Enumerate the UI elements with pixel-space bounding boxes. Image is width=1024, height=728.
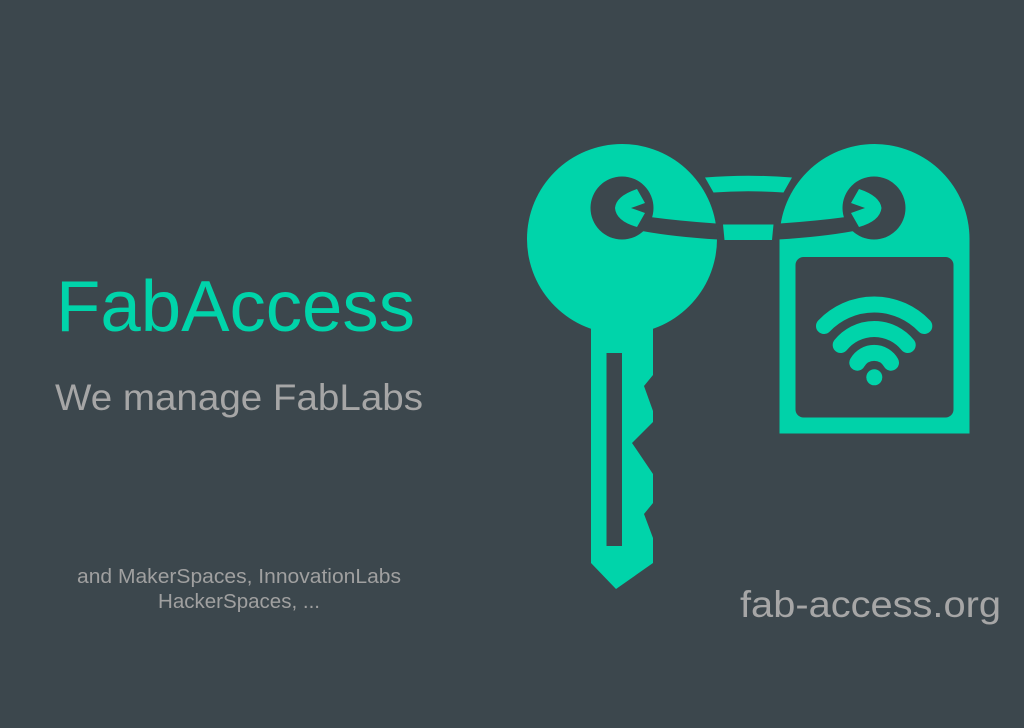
tag hole bbox=[842, 176, 906, 240]
tag hole inner ring end bbox=[851, 189, 882, 227]
icon: key bbox=[527, 144, 718, 589]
secondary text: and MakerSpaces, InnovationLabs bbox=[77, 566, 401, 588]
secondary text: HackerSpaces, ... bbox=[158, 591, 320, 613]
wifi symbol bbox=[824, 305, 924, 385]
tag body bbox=[780, 144, 970, 434]
icon: wifi tag bbox=[778, 144, 970, 434]
icon: key ring link bbox=[705, 176, 792, 240]
secondary text bbox=[77, 566, 401, 613]
key cord gap bbox=[642, 217, 718, 240]
key shaft slot bbox=[606, 353, 622, 546]
tag window bbox=[796, 257, 954, 418]
ring bottom segment bbox=[723, 224, 774, 240]
key head bbox=[527, 144, 717, 334]
key hole bbox=[590, 176, 654, 240]
website url: fab-access.org bbox=[740, 584, 1001, 625]
ring top segment bbox=[705, 176, 792, 192]
key hole inner ring end bbox=[615, 189, 645, 227]
key shaft with teeth bbox=[591, 325, 653, 589]
tagline: We manage FabLabs bbox=[55, 377, 423, 418]
title: FabAccess bbox=[56, 266, 415, 347]
tag cord gap bbox=[778, 217, 854, 240]
